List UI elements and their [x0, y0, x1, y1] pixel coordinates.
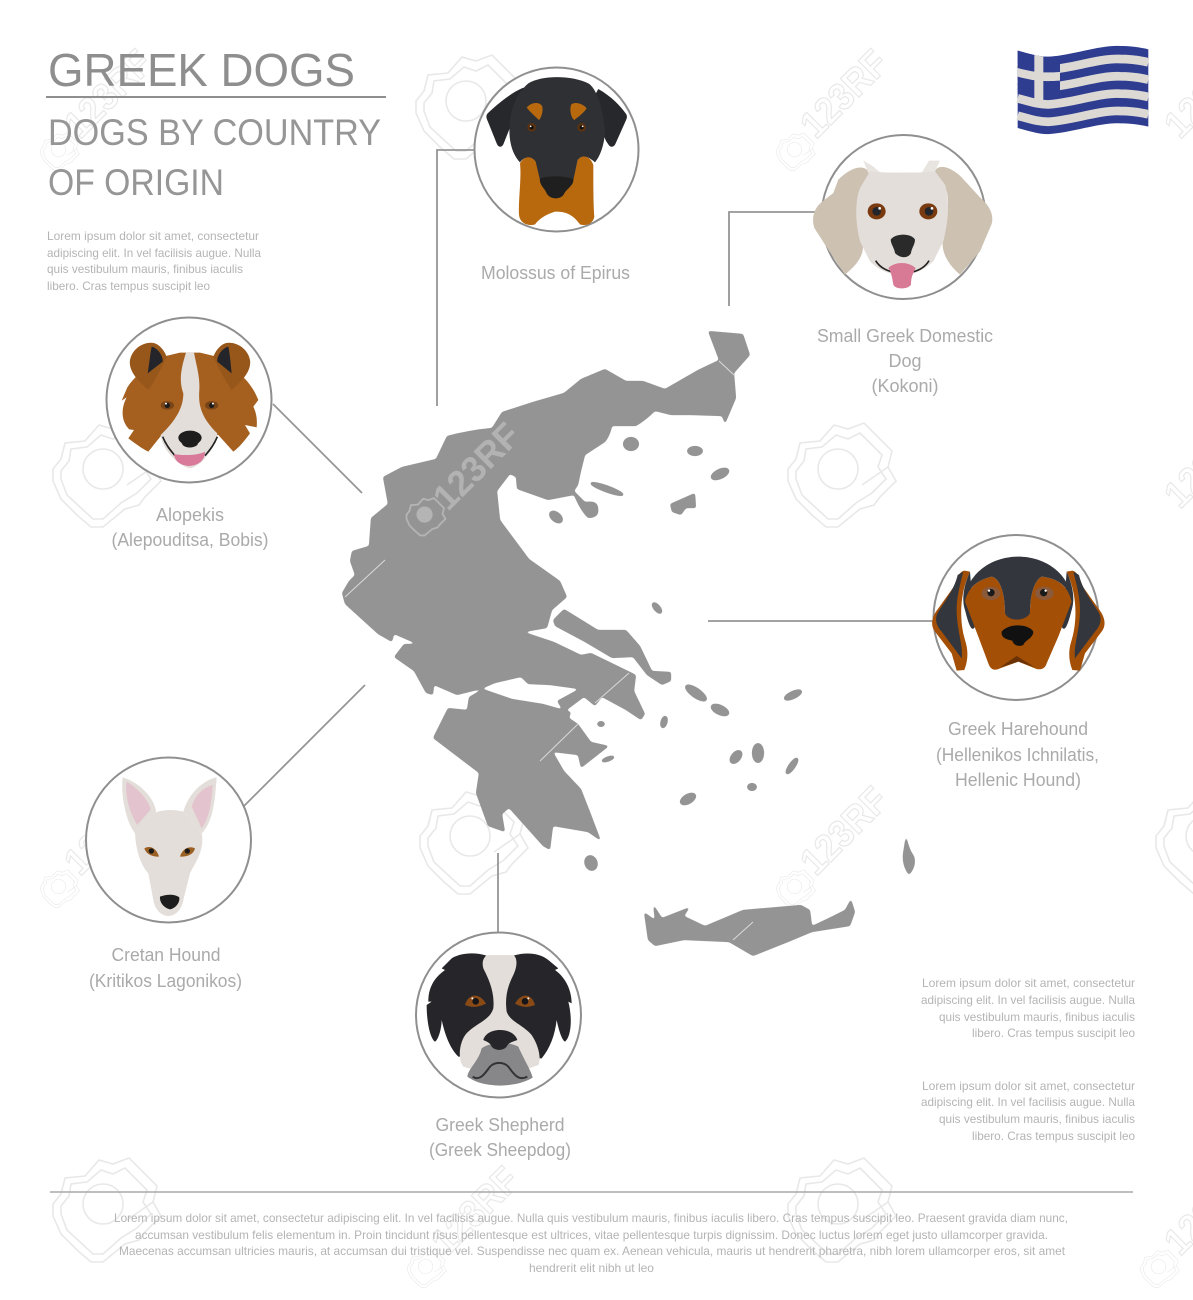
label	[112, 505, 268, 550]
title: DOGS BY COUNTRY	[48, 112, 381, 153]
connector: Shepherd	[497, 853, 499, 932]
panel: Molossus of Epirus	[474, 68, 638, 283]
Aegean islands	[547, 437, 915, 875]
icon: Cretan Hound face	[122, 777, 217, 916]
footer text block	[114, 1211, 1068, 1275]
label: (Hellenikos Ichnilatis,	[936, 745, 1099, 765]
right text block 2: quis vestibulum mauris, finibus iaculis	[939, 1112, 1135, 1126]
connector: Harehound	[708, 620, 933, 622]
Crete	[644, 899, 855, 956]
title: GREEK DOGS	[48, 44, 355, 96]
label: (Alepouditsa, Bobis)	[112, 530, 268, 550]
label: Dog	[888, 351, 922, 371]
connector: Kokoni	[729, 212, 815, 306]
label: Greek Shepherd	[436, 1115, 564, 1135]
label: (Kritikos Lagonikos)	[89, 971, 242, 991]
intro text block: libero. Cras tempus suscipit leo	[47, 279, 210, 293]
label	[429, 1115, 571, 1160]
right text block 1: adipiscing elit. In vel facilisis augue. Nulla	[921, 993, 1135, 1007]
icon: Harehound face	[932, 557, 1105, 671]
panel: Greek Harehound	[932, 535, 1105, 790]
mainland	[342, 331, 750, 720]
watermarks: 123RF	[57, 42, 161, 146]
Euboea	[553, 609, 671, 685]
intro text block: adipiscing elit. In vel facilisis augue. Nulla	[47, 246, 261, 260]
right text block 1: quis vestibulum mauris, finibus iaculis	[939, 1010, 1135, 1024]
right text block 2	[921, 1079, 1135, 1143]
connector: Molossus	[437, 150, 474, 406]
intro text block: quis vestibulum mauris, finibus iaculis	[47, 262, 243, 276]
label	[936, 719, 1099, 790]
label: (Greek Sheepdog)	[429, 1140, 571, 1160]
right text block 2: adipiscing elit. In vel facilisis augue. Nulla	[921, 1095, 1135, 1109]
watermarks: 123RF	[424, 1159, 528, 1263]
icon: Molossus face	[486, 77, 627, 225]
right text block 1: libero. Cras tempus suscipit leo	[972, 1026, 1135, 1040]
connector: Cretan Hound	[244, 685, 365, 806]
title: OF ORIGIN	[48, 162, 224, 203]
label: Greek Harehound	[948, 719, 1088, 739]
watermarks: 123RF	[57, 779, 161, 883]
Peloponnese	[433, 689, 609, 850]
intro text block: Lorem ipsum dolor sit amet, consectetur	[47, 229, 259, 243]
label: Hellenic Hound)	[955, 770, 1081, 790]
panel: Alopekis	[106, 318, 272, 550]
map watermark: 123RF	[425, 414, 528, 518]
icon: Greek Shepherd face	[427, 953, 572, 1086]
panel: Small Greek Domestic Dog	[813, 135, 993, 396]
label: Cretan Hound	[112, 945, 220, 965]
label	[817, 326, 993, 396]
map of Greece	[342, 331, 915, 956]
label: Molossus of Epirus	[481, 263, 630, 283]
right text block 2: libero. Cras tempus suscipit leo	[972, 1129, 1135, 1143]
label: Small Greek Domestic	[817, 326, 993, 346]
label: Alopekis	[156, 505, 224, 525]
footer text block: Maecenas accumsan ultricies mauris, at accumsan dui tristique vel. Suspendisse nec quam ex. Aenean vehicula, mauris ut hendrerit pharetra, nibh lorem ullamcorper eros, sit amet	[119, 1244, 1066, 1258]
footer text block: Lorem ipsum dolor sit amet, consectetur adipiscing elit. In vel facilisis augue. Nulla quis vestibulum mauris, finibus iaculis libero. Cras tempus suscipit leo. Praesent gravida diam nunc,	[114, 1211, 1068, 1225]
map watermark	[345, 361, 753, 940]
right text block 1: Lorem ipsum dolor sit amet, consectetur	[922, 976, 1135, 990]
watermarks: 123RF	[793, 42, 897, 146]
icon: Alopekis face	[122, 343, 258, 468]
label: (Kokoni)	[871, 376, 939, 396]
watermarks: 123RF	[793, 779, 897, 883]
icon: Kokoni face	[813, 161, 992, 288]
label	[89, 945, 242, 991]
right text block 2: Lorem ipsum dolor sit amet, consectetur	[922, 1079, 1135, 1093]
right text block 1	[921, 976, 1135, 1040]
panel: Greek Shepherd	[416, 932, 581, 1160]
panel: Cretan Hound	[86, 758, 251, 991]
icon: Greek flag	[1018, 46, 1148, 134]
connector: Alopekis	[273, 404, 362, 493]
footer text block: accumsan vestibulum felis elementum in. Proin tincidunt risus pellentesque est ultrices, vitae pellentesque turpis dignissim. Donec luctus lorem eget justo ullamcorper gravida.	[135, 1228, 1048, 1242]
footer rule	[50, 1191, 1133, 1193]
intro text block	[47, 229, 261, 293]
footer text block: hendrerit elit nibh ut leo	[529, 1261, 654, 1275]
title	[46, 44, 386, 203]
